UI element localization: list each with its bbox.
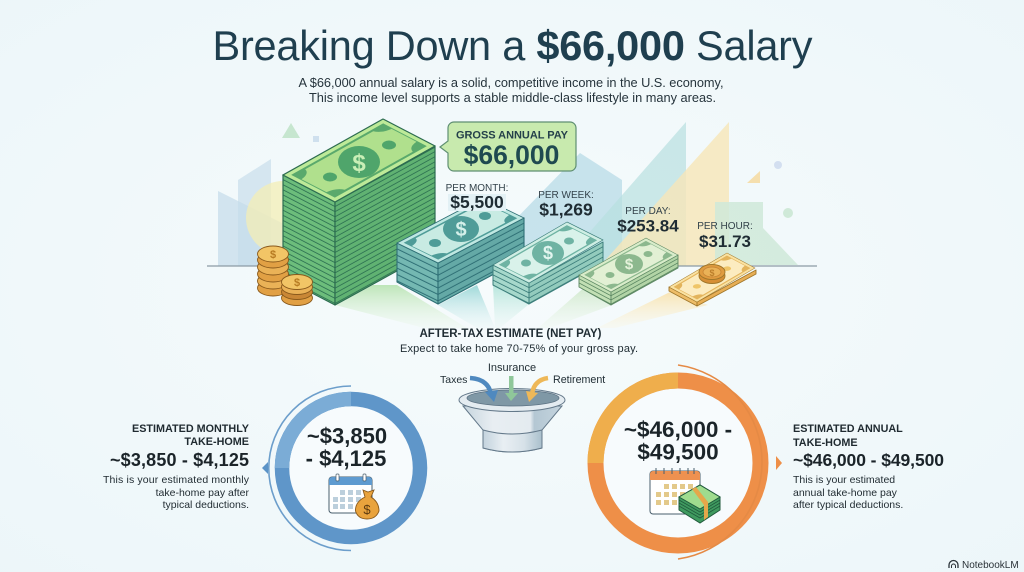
per-period labels: PER DAY: bbox=[625, 206, 671, 217]
per-period labels: PER WEEK: bbox=[538, 190, 594, 201]
per month stack: $ bbox=[455, 219, 467, 241]
annual take-home text: annual take-home pay bbox=[793, 487, 898, 499]
subtitle: A $66,000 annual salary is a solid, competitive income in the U.S. economy, bbox=[298, 75, 724, 90]
monthly take-home ring bbox=[262, 386, 420, 550]
per day stack: $ bbox=[625, 256, 634, 273]
per month stack bbox=[397, 198, 524, 304]
monthly take-home text: TAKE-HOME bbox=[184, 436, 249, 448]
monthly take-home ring: ~$3,850 bbox=[307, 424, 387, 448]
per-period labels: $1,269 bbox=[539, 200, 593, 220]
icon: calendar and money bag: $ bbox=[363, 502, 371, 517]
annual take-home text: This is your estimated bbox=[793, 474, 895, 486]
annual take-home ring: $49,500 bbox=[637, 440, 719, 464]
annual take-home ring bbox=[596, 365, 782, 559]
coins bbox=[258, 246, 312, 306]
coins: $ bbox=[294, 277, 300, 289]
coins: $ bbox=[270, 249, 276, 261]
big money stack bbox=[283, 119, 435, 305]
per-period labels bbox=[446, 183, 753, 251]
per-period labels: PER HOUR: bbox=[697, 221, 753, 232]
annual take-home text: TAKE-HOME bbox=[793, 437, 858, 449]
monthly take-home text: ESTIMATED MONTHLY bbox=[132, 423, 250, 435]
annual take-home text bbox=[793, 423, 944, 511]
funnel with deductions: Insurance bbox=[488, 362, 536, 374]
funnel with deductions: Taxes bbox=[440, 374, 467, 386]
after-tax heading: AFTER-TAX ESTIMATE (NET PAY) bbox=[420, 328, 602, 340]
NotebookLM badge: NotebookLM bbox=[962, 560, 1019, 571]
monthly take-home text: This is your estimated monthly bbox=[103, 474, 250, 486]
per-period labels: PER MONTH: bbox=[446, 183, 508, 194]
gross annual pay callout bbox=[440, 122, 576, 171]
funnel with deductions bbox=[440, 362, 605, 452]
rays from stacks to net pay bbox=[335, 285, 708, 328]
per day stack bbox=[579, 238, 678, 305]
subtitle: This income level supports a stable middle-class lifestyle in many areas. bbox=[309, 90, 716, 105]
per week stack: $ bbox=[543, 243, 553, 263]
monthly take-home text: take-home pay after bbox=[156, 487, 249, 499]
per-period labels: $31.73 bbox=[699, 232, 751, 251]
ground line bbox=[207, 265, 817, 267]
per-period labels: $253.84 bbox=[617, 216, 679, 236]
annual take-home text: ~$46,000 - $49,500 bbox=[793, 450, 944, 470]
after-tax heading bbox=[400, 328, 638, 355]
monthly take-home text bbox=[103, 423, 250, 511]
icon: calendar and money bag bbox=[329, 474, 379, 519]
title: Breaking Down a $66,000 Salary bbox=[212, 22, 813, 69]
subtitle bbox=[298, 75, 724, 105]
monthly take-home text: ~$3,850 - $4,125 bbox=[110, 450, 249, 470]
annual take-home ring: ~$46,000 - bbox=[624, 417, 732, 442]
after-tax heading: Expect to take home 70-75% of your gross pay. bbox=[400, 343, 638, 355]
per hour bill and coin bbox=[669, 253, 756, 306]
big money stack: $ bbox=[352, 150, 366, 177]
gross annual pay callout: $66,000 bbox=[464, 140, 559, 170]
per hour bill and coin: $ bbox=[709, 268, 715, 278]
annual take-home text: after typical deductions. bbox=[793, 499, 903, 511]
per-period labels: $5,500 bbox=[450, 192, 504, 212]
monthly take-home ring: - $4,125 bbox=[306, 446, 386, 471]
gross annual pay callout: GROSS ANNUAL PAY bbox=[456, 130, 569, 142]
annual take-home text: ESTIMATED ANNUAL bbox=[793, 423, 903, 435]
icon: calendar and cash bbox=[650, 468, 720, 523]
monthly take-home text: typical deductions. bbox=[163, 499, 249, 511]
background geometric shapes bbox=[218, 122, 798, 266]
per week stack bbox=[493, 222, 603, 304]
funnel with deductions: Retirement bbox=[553, 374, 605, 386]
